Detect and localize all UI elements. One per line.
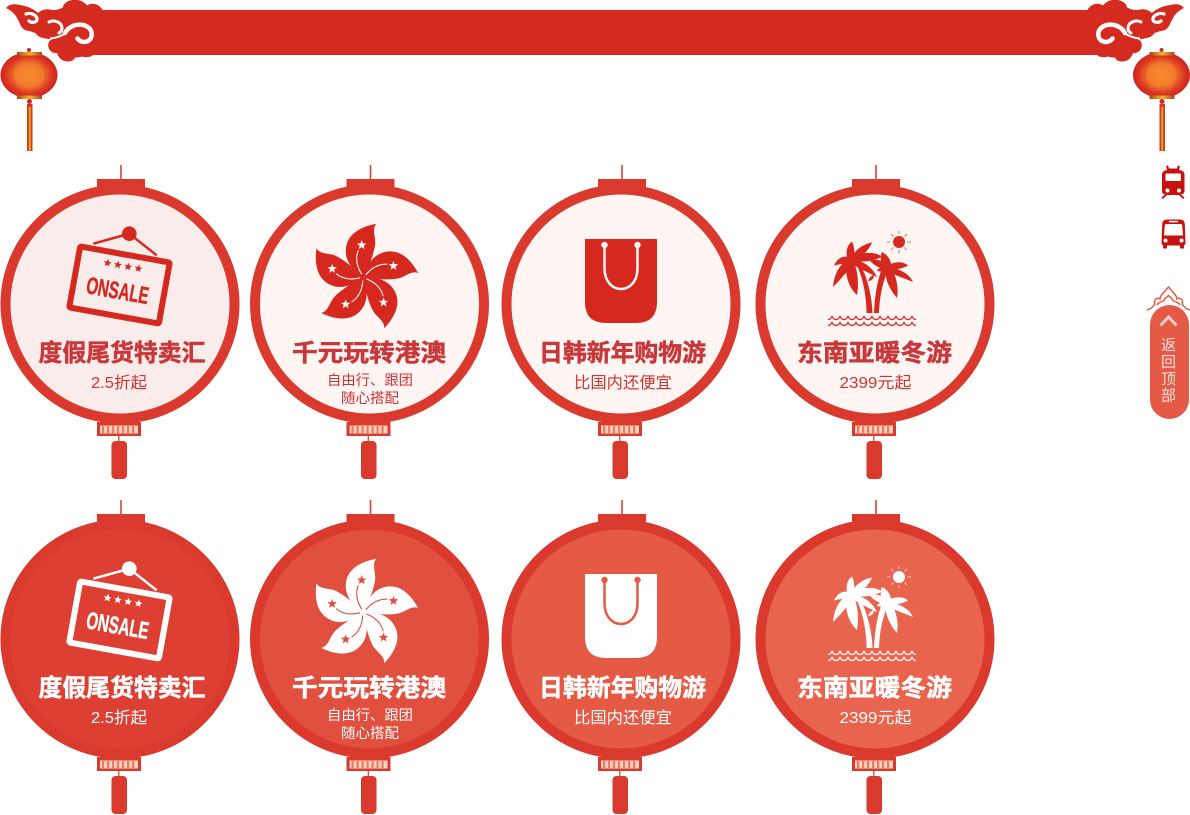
back to top button: 返 [1161,337,1176,354]
panel: lantern shopping row 2 [506,500,736,814]
panel: lantern sale row 1 [6,165,234,479]
heading: Hong Kong and Macau: 千元玩转港澳 [292,340,446,367]
panel: lantern Hong Kong row 2 [255,500,484,814]
panel: lantern Hong Kong row 1 [255,165,484,479]
subtext: travel modes white: 自由行、跟团 [327,707,413,723]
back to top button: 顶 [1161,371,1176,388]
subtext: discount: 2.5折起 [91,374,147,392]
back to top button: 部 [1161,388,1176,404]
icon: shopping bag white [585,574,657,658]
panel: lantern Southeast Asia row 2 [760,500,990,814]
subtext: travel modes: 自由行、跟团 [327,372,413,388]
heading: Hong Kong and Macau white: 千元玩转港澳 [292,675,446,702]
subtext: cheaper than domestic: 比国内还便宜 [574,374,672,392]
icon: bauhinia flower white [307,559,418,666]
hanging lantern left [0,48,58,151]
icon: bus [1162,220,1186,248]
back to top button [1147,287,1190,419]
heading: Japan and Korea: 日韩新年购物游 [539,340,706,367]
hanging lantern right [1133,48,1190,151]
heading: holiday clearance: 度假尾货特卖汇 [38,340,206,367]
back to top button: 回 [1161,354,1176,371]
ornament on button [1147,287,1190,310]
icon: on sale sign white: ONSALE [84,607,151,645]
cloud ornament right [1086,0,1184,62]
icon: on sale sign white [69,561,170,659]
heading: Southeast Asia: 东南亚暖冬游 [797,340,952,367]
icon: palm trees [828,231,916,326]
heading: holiday clearance white: 度假尾货特卖汇 [38,675,206,702]
icon: train [1162,166,1184,199]
heading: Japan and Korea white: 日韩新年购物游 [539,675,706,702]
heading: Southeast Asia white: 东南亚暖冬游 [797,675,952,702]
cloud ornament left [6,0,104,62]
subtext: travel modes: 随心搭配 [341,390,399,406]
subtext: travel modes white [327,707,413,741]
panel: lantern sale row 2 [6,500,234,814]
top banner bar [95,10,1095,55]
icon: bauhinia flower [307,224,418,331]
panel: lantern shopping row 1 [506,165,736,479]
panel: lantern Southeast Asia row 1 [760,165,990,479]
icon: on sale sign [69,226,170,324]
subtext: discount white: 2.5折起 [91,709,147,727]
subtext: travel modes white: 随心搭配 [341,725,399,741]
icon: palm trees white [828,566,916,660]
icon: on sale sign: ONSALE [84,272,151,310]
subtext: price white: 2399元起 [840,709,912,727]
subtext: price: 2399元起 [840,374,912,392]
subtext: cheaper than domestic white: 比国内还便宜 [574,709,672,727]
subtext: travel modes [327,372,413,406]
icon: shopping bag [585,239,657,323]
